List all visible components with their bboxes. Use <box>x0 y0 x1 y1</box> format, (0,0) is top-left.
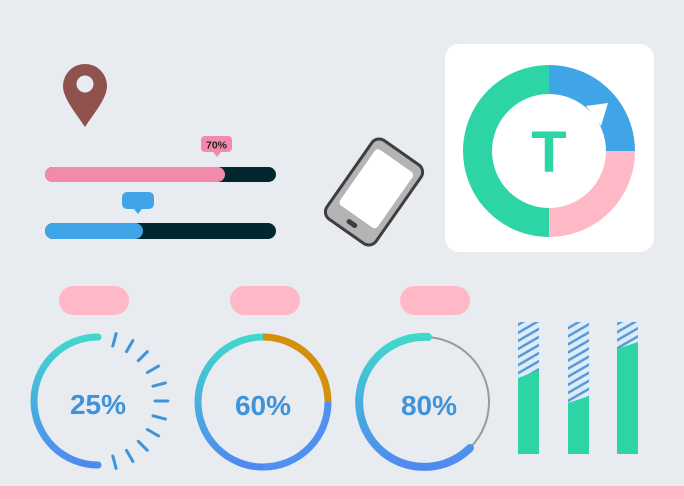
letter T: T <box>531 120 567 185</box>
icon: phone <box>322 135 426 249</box>
gauge: 60% <box>198 337 328 467</box>
gauge: 25%: 25% <box>70 389 126 420</box>
gauge: 80% <box>359 337 489 467</box>
tag: 70%: 70% <box>206 140 228 152</box>
gauge: 60%: 60% <box>235 390 291 421</box>
gauge: 80%: 80% <box>401 390 457 421</box>
gauge: 25% <box>34 334 168 468</box>
icon: location pin <box>63 64 107 127</box>
progress bar: blue <box>45 223 276 239</box>
bar chart <box>518 322 638 454</box>
tag: blue <box>122 192 154 214</box>
donut ring <box>477 80 620 222</box>
card: T logo <box>445 44 654 252</box>
footer band <box>0 486 684 499</box>
speech notch <box>586 103 608 126</box>
tag: 70% <box>201 136 232 157</box>
progress bar: pink 70% <box>45 167 276 182</box>
label pills <box>59 286 470 315</box>
